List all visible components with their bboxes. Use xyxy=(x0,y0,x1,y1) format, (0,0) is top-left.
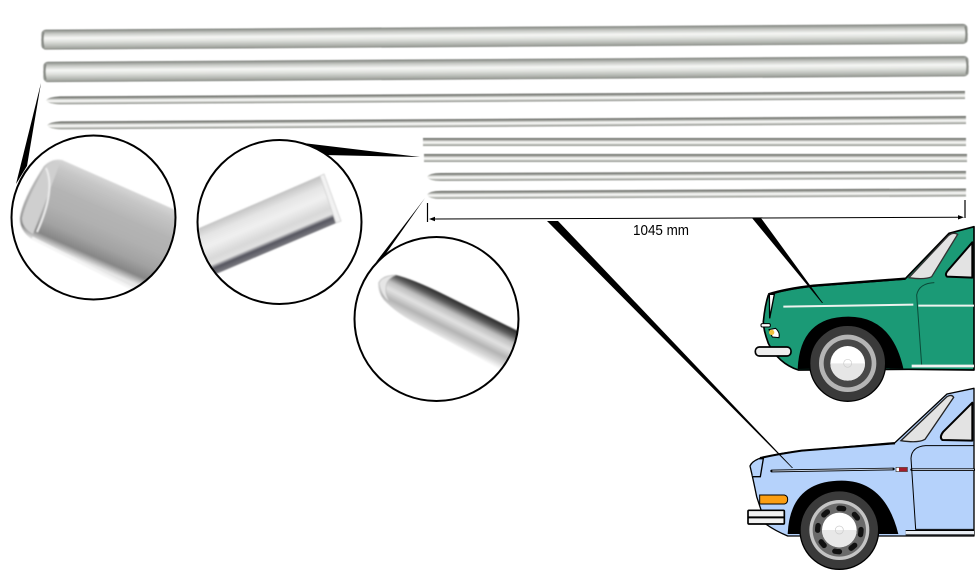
dimension label: 1045 mm xyxy=(633,222,689,239)
blue car body xyxy=(750,388,974,536)
blue car door line xyxy=(911,446,974,529)
blue car roofline shadow xyxy=(760,443,895,458)
strip 4: long narrow xyxy=(47,116,966,129)
leader: strip 2 to detail circle 1 xyxy=(16,83,41,184)
detail circle 1: flat wide end xyxy=(12,136,180,300)
blue car wheel arch xyxy=(788,481,898,534)
green car indicator xyxy=(769,328,779,338)
green car xyxy=(755,227,974,401)
blue car red side marker xyxy=(896,467,907,472)
strip 2: long wide xyxy=(43,56,969,82)
green car side window xyxy=(946,242,972,278)
detail circle 2: flat narrow end xyxy=(190,140,362,304)
blue car side trim strip xyxy=(772,469,974,471)
green car side trim strip xyxy=(783,305,974,307)
green car body xyxy=(763,227,974,370)
leader: strip 6 to detail circle 2 xyxy=(303,143,420,157)
dimension line: 1045 mm xyxy=(428,200,965,239)
green car door line xyxy=(917,283,934,365)
blue car trim highlight xyxy=(772,469,974,471)
strip 1: long wide xyxy=(41,24,968,50)
blue car xyxy=(748,388,974,569)
detail circle 3: pointed end xyxy=(354,237,522,401)
green car wheel xyxy=(810,325,886,401)
leader: green car to strip xyxy=(752,218,823,303)
green car sill trim xyxy=(912,362,974,370)
green car wheel arch xyxy=(798,317,903,369)
strip 8: short pointed end xyxy=(427,188,966,199)
green car roofline shadow xyxy=(768,279,905,294)
strip 6: short square end xyxy=(424,154,967,162)
blue car bumper xyxy=(748,510,784,524)
trim strips xyxy=(41,24,969,199)
blue car front grille edge xyxy=(752,459,763,477)
blue car windscreen xyxy=(901,395,954,442)
strip 7: short pointed end xyxy=(427,171,966,181)
green car side marker xyxy=(761,324,770,327)
green car windscreen xyxy=(909,233,958,279)
blue car wheel xyxy=(800,491,879,569)
green car headlight grille xyxy=(769,294,774,318)
strip 5: short square end xyxy=(423,138,966,146)
blue car side window xyxy=(941,403,972,441)
leader: blue car to strip xyxy=(547,221,793,468)
green car bumper xyxy=(755,347,791,356)
blue car orange indicator xyxy=(760,495,788,504)
blue car sill trim xyxy=(906,525,974,541)
green car indicator lens xyxy=(769,330,774,335)
leader: strip 8 to detail circle 3 xyxy=(376,198,425,262)
strip 3: long narrow xyxy=(46,91,965,104)
